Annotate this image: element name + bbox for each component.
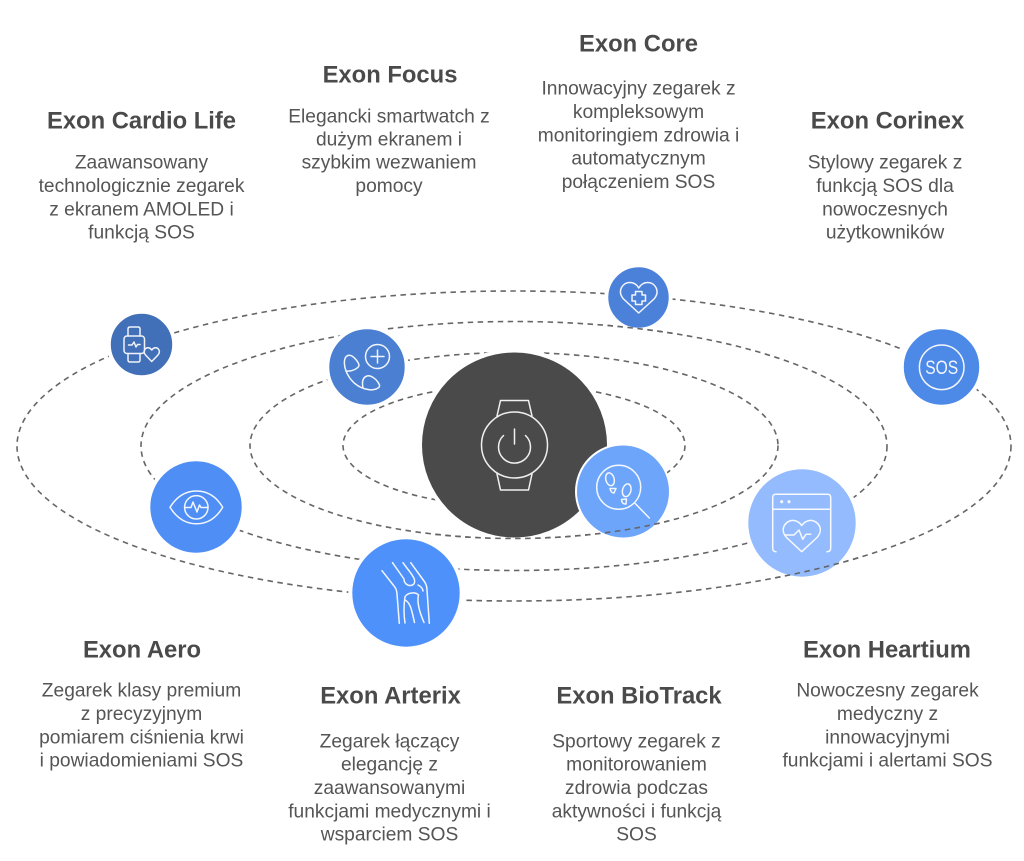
text: Exon Arterix: funkcjami medycznymi i <box>288 802 491 822</box>
icon: smartwatch and heart <box>124 327 159 362</box>
text: Exon BioTrack: aktywności i funkcją <box>552 802 722 822</box>
text: Exon Heartium: Nowoczesny zegarek <box>796 680 979 702</box>
text: Exon Core <box>538 30 739 193</box>
text: Exon Heartium <box>782 636 993 772</box>
icon: eye with pulse <box>170 491 223 524</box>
node: Exon Heartium <box>746 467 858 579</box>
text: Exon Cardio Life: funkcją SOS <box>88 222 195 244</box>
text: Exon Cardio Life: Exon Cardio Life <box>47 108 236 134</box>
text: Exon BioTrack: SOS <box>616 824 657 846</box>
text: Exon Aero: Exon Aero <box>83 636 201 664</box>
text: Exon Aero: i powiadomieniami SOS <box>40 750 243 772</box>
central watch hub <box>420 350 609 540</box>
text: Exon Core: kompleksowym <box>573 102 704 123</box>
text: Exon Heartium: Exon Heartium <box>803 636 971 664</box>
icon: browser window with heart <box>773 494 831 552</box>
orbit rings <box>17 291 1011 601</box>
node: Exon Core <box>606 265 671 330</box>
text: Exon Cardio Life: technologicznie zegarek <box>39 176 245 197</box>
text: Exon Aero: pomiarem ciśnienia krwi <box>39 728 244 748</box>
text: Exon Cardio Life: z ekranem AMOLED i <box>49 200 234 220</box>
text: Exon Corinex: użytkowników <box>826 222 944 244</box>
text: Exon Core: Exon Core <box>579 30 698 58</box>
text: Exon Heartium: funkcjami i alertami SOS <box>782 750 993 772</box>
node: Exon Arterix <box>350 537 462 649</box>
text: Exon Arterix: wsparciem SOS <box>320 824 458 846</box>
icon: SOS badge: SOS <box>925 358 958 379</box>
text: Exon Heartium: medyczny z <box>837 704 938 725</box>
text: Exon Core: monitoringiem zdrowia i <box>538 126 739 146</box>
text: Exon Heartium: innowacyjnymi <box>825 728 950 748</box>
text: Exon Focus: szybkim wezwaniem <box>302 152 476 174</box>
text: Exon Corinex <box>808 108 965 244</box>
text: Exon Focus: Elegancki smartwatch z <box>288 106 490 128</box>
text: Exon Core: automatycznym <box>571 148 706 170</box>
text: Exon Focus: Exon Focus <box>323 62 457 88</box>
text: Exon BioTrack: zdrowia podczas <box>565 778 708 799</box>
text: Exon Focus: pomocy <box>355 176 423 197</box>
text: Exon Corinex: Exon Corinex <box>811 108 965 134</box>
text: Exon Arterix: Exon Arterix <box>320 682 462 710</box>
node: Exon Focus <box>327 327 407 407</box>
text: Exon Aero: Zegarek klasy premium <box>42 680 241 702</box>
text: Exon BioTrack: Sportowy zegarek z <box>552 732 721 752</box>
text: Exon Core: połączeniem SOS <box>562 172 715 193</box>
text: Exon Core: Innowacyjny zegarek z <box>541 78 736 100</box>
icon: watch with power symbol <box>482 400 548 490</box>
text: Exon BioTrack <box>552 682 722 846</box>
text: Exon Cardio Life: Zaawansowany <box>75 152 209 174</box>
text: Exon Corinex: funkcją SOS dla <box>816 176 954 197</box>
text: Exon Arterix: elegancję z <box>341 754 438 776</box>
text: Exon Corinex: Stylowy zegarek z <box>808 152 962 174</box>
node: Exon Aero <box>148 459 244 555</box>
text: Exon Arterix <box>288 682 491 846</box>
icon: knee joint <box>382 563 429 623</box>
node: Exon BioTrack <box>576 444 670 538</box>
text: Exon Arterix: zaawansowanymi <box>314 778 465 799</box>
text: Exon Aero: z precyzyjnym <box>81 704 202 725</box>
ring segments passing over hub, BioTrack, Heartium and Core <box>430 324 858 580</box>
icon: heart with medical cross <box>621 282 657 313</box>
text: Exon Focus: dużym ekranem i <box>316 130 462 150</box>
icon: phone call with plus <box>344 344 390 390</box>
icon: magnifier over footprints <box>597 465 649 518</box>
node: Exon Cardio Life <box>109 312 174 377</box>
node: Exon Corinex <box>902 327 981 407</box>
text: Exon Cardio Life <box>39 108 245 244</box>
text: Exon Corinex: nowoczesnych <box>822 200 948 220</box>
text: Exon Aero <box>39 636 244 772</box>
text: Exon BioTrack: monitorowaniem <box>566 754 707 776</box>
text: Exon BioTrack: Exon BioTrack <box>556 682 722 710</box>
text: Exon Focus <box>288 62 490 197</box>
text: Exon Arterix: Zegarek łączący <box>320 732 460 752</box>
